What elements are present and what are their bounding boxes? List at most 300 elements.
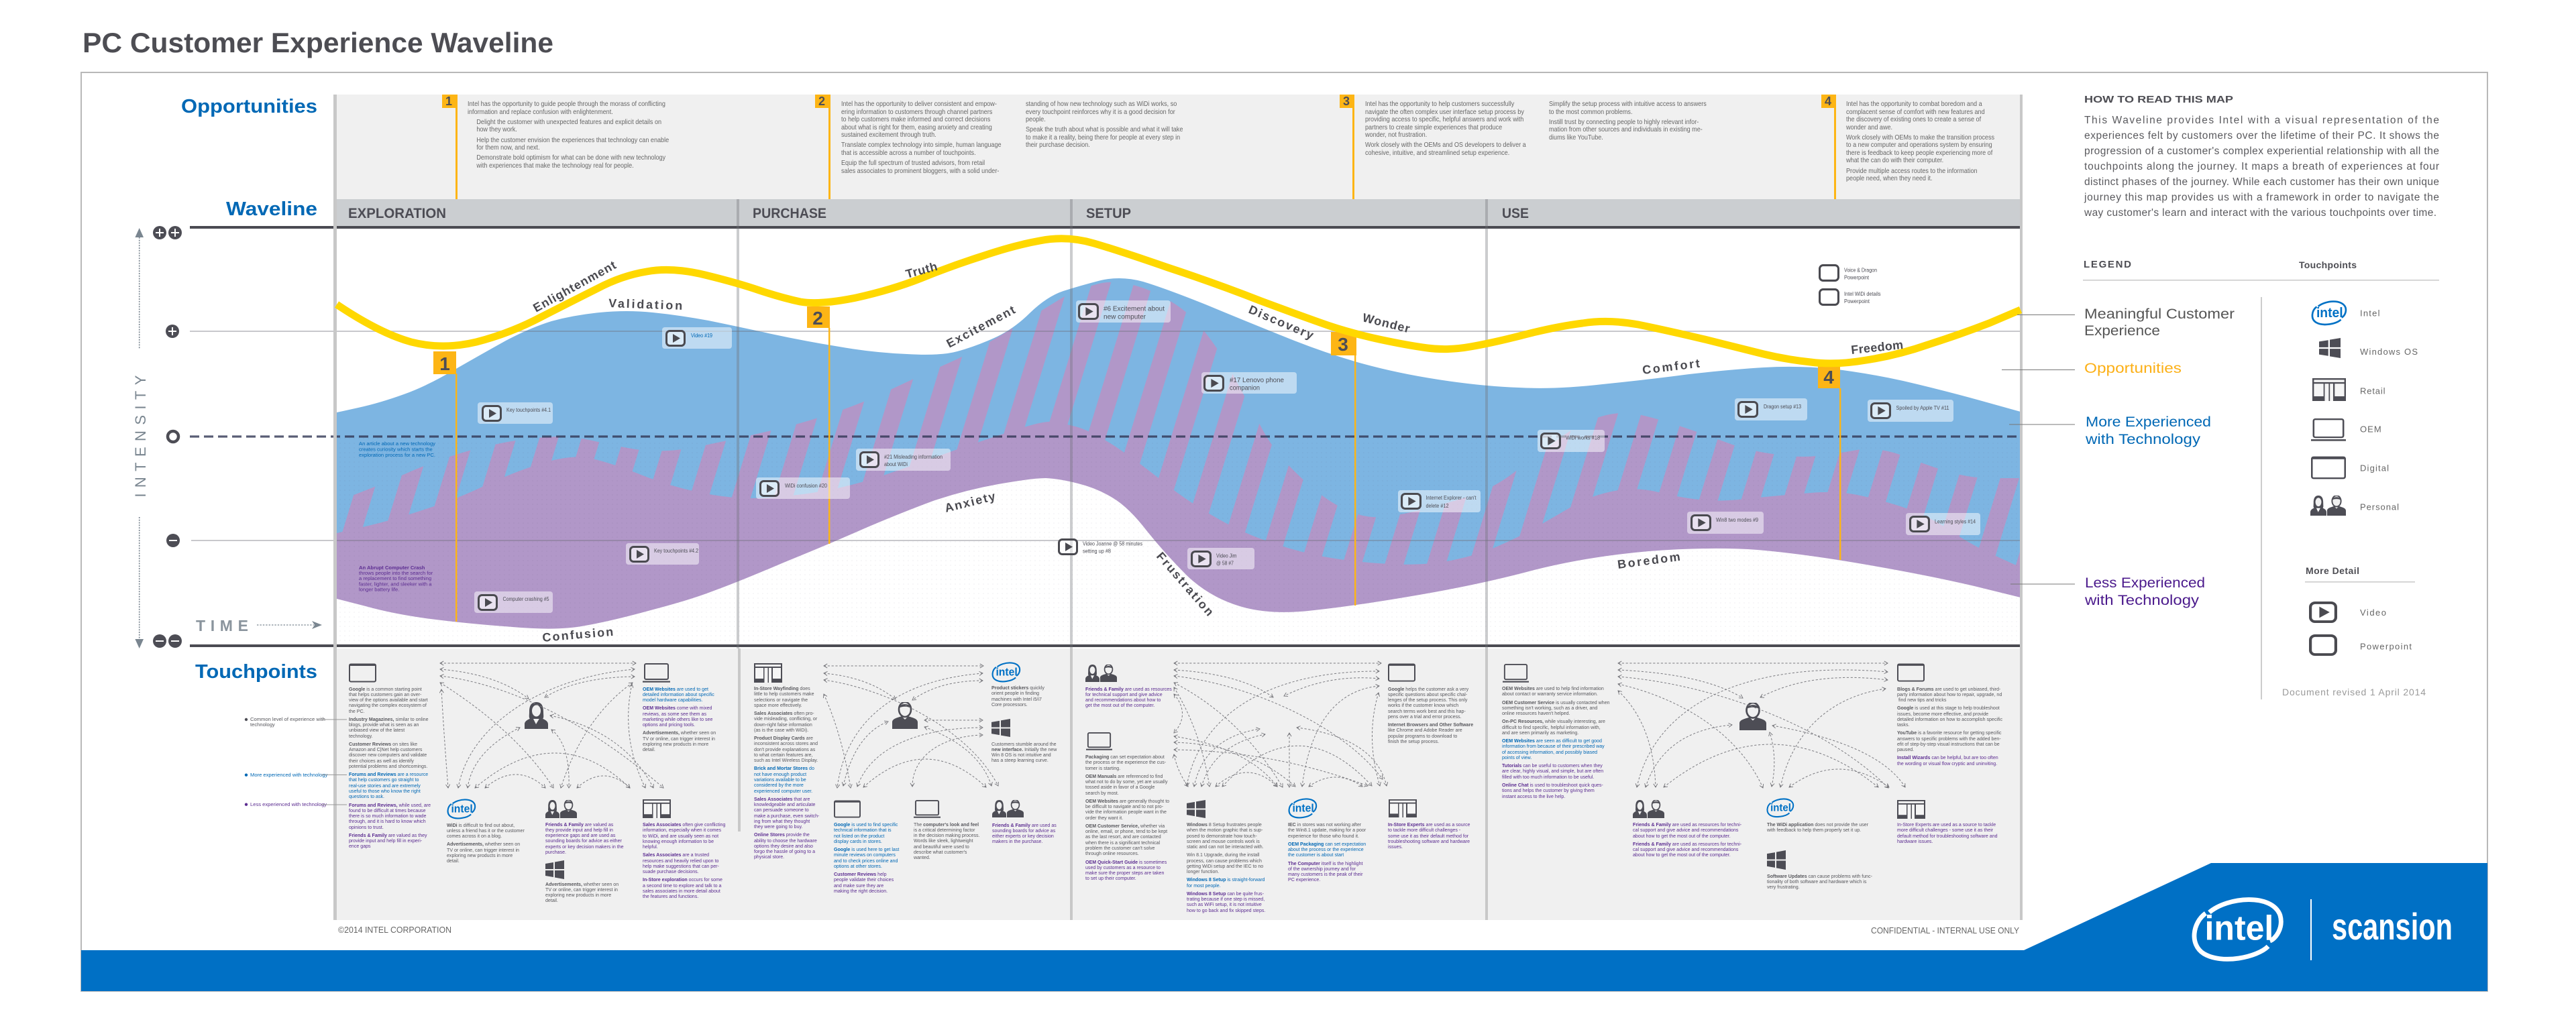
purchase text: digital: and make sure they are xyxy=(834,882,883,889)
purchase text: retail: space more effectively. xyxy=(754,702,802,708)
setup text: oem: search by most. xyxy=(1085,790,1119,796)
exploration text: digital: provide input and help fill in experi- xyxy=(349,838,422,844)
opportunity text 1: for them now, and next. xyxy=(476,144,540,152)
opportunity text 2, second column: every touchpoint reinforces why it is a good decision for xyxy=(1026,109,1175,115)
title: PC Customer Experience Waveline xyxy=(83,27,553,58)
purchase text: retail: knowledgeable and articulate xyxy=(754,801,815,807)
use text: oem xyxy=(1502,685,1610,799)
chip: internet explorer: Internet Explorer - can't xyxy=(1426,495,1477,501)
setup text: personal: for technical support and give advice xyxy=(1085,691,1163,697)
chip: internet explorer: delete #12 xyxy=(1426,503,1449,509)
legend: more experienced: with Technology xyxy=(2085,432,2201,447)
use text: retail: In-Store Experts are used as a source to tackle xyxy=(1897,821,1996,827)
setup text: oem: OEM Manuals are referenced to find xyxy=(1085,773,1163,779)
area: more experienced xyxy=(337,278,2021,647)
legend item: video: Video xyxy=(2360,608,2386,618)
exploration text: windows xyxy=(545,881,619,903)
exploration text: digital: opinions to trust. xyxy=(349,824,384,830)
setup text: windows: when the motion graphic that is sup- xyxy=(1187,827,1263,833)
opportunity text 1: how they work. xyxy=(476,126,517,133)
chip: video jim: @ 58 #7 xyxy=(1216,561,1234,566)
setup text: oem: when there is a significant technical xyxy=(1085,840,1160,846)
use text: personal: cal support and give advice and recommendations xyxy=(1633,827,1738,833)
setup text: digital: Google helps the customer ask a very xyxy=(1388,685,1468,692)
legend: touchpoint icons xyxy=(2310,302,2418,516)
exploration text: digital: blogs, provide what is seen as an xyxy=(349,722,419,728)
use text: intel: The WiDi application does not provide the user xyxy=(1767,821,1868,827)
setup text: digital: like Chrome and Adobe Reader are xyxy=(1388,727,1462,733)
legend: less experienced xyxy=(2084,575,2205,608)
legend: meaningful customer experience: Meaningful Customer xyxy=(2084,306,2235,322)
exploration text: oem: Advertisements, whether seen on xyxy=(643,730,716,736)
opportunity text 2, second column: people. xyxy=(1026,116,1046,123)
setup text: oem: vide the information people want in the xyxy=(1085,809,1167,815)
exploration text: windows: detail. xyxy=(545,897,557,903)
opportunity text 4 xyxy=(1846,101,1994,182)
purchase text: digital: minute reviews on computers xyxy=(834,852,896,858)
use text: retail xyxy=(1897,821,1998,844)
touchpoint key: experience levels: Common level of experience with xyxy=(250,716,325,722)
setup text: digital: search terms work best and this hap- xyxy=(1388,708,1466,714)
exploration text: oem: detailed information about specific xyxy=(643,691,714,697)
setup text: intel xyxy=(1288,821,1366,882)
legend divider xyxy=(2261,297,2262,699)
purchase text: retail: not have enough product xyxy=(754,771,806,777)
exploration text: retail: a second time to explore and talk to a xyxy=(643,882,721,889)
area: below the wave xyxy=(337,478,2021,647)
setup text: windows: for most people. xyxy=(1187,882,1221,889)
use text: digital: tasks. xyxy=(1897,722,1909,728)
chip: misleading information xyxy=(856,449,951,471)
chip: misleading information: #21 Misleading information xyxy=(884,454,943,460)
purchase text: retail: ability to choose the hardware xyxy=(754,838,817,844)
use text: retail: hardware issues. xyxy=(1897,838,1933,844)
opportunity text 2, first column: sales associates to prominent bloggers, with a solid under- xyxy=(841,168,999,175)
wave emotion labels xyxy=(531,258,1904,644)
phase header band: EXPLORATION xyxy=(348,206,446,221)
purchase text: retail: Sales Associates that are xyxy=(754,796,810,802)
setup text: windows: posed to demonstrate how touch- xyxy=(1187,833,1257,839)
opportunity text 1: Demonstrate bold optimism for what can be done with new technology xyxy=(476,154,665,162)
axis: time arrow and label xyxy=(196,617,322,634)
exploration text: digital: Customer Reviews on sites like xyxy=(349,741,417,747)
use text: oem: and are seen primarily as marketing. xyxy=(1502,730,1578,736)
setup text: intel: many customers is the peak of their xyxy=(1288,871,1362,877)
setup text: retail: In-Store Experts are used as a source xyxy=(1388,821,1470,827)
axis: intensity arrow and label xyxy=(132,228,149,648)
legend item: digital: Digital xyxy=(2360,463,2389,473)
legend item: personal: Personal xyxy=(2360,502,2399,512)
opportunity text 4: Provide multiple access routes to the information xyxy=(1846,168,1978,175)
legend heading: LEGEND xyxy=(2084,259,2131,270)
use text: personal: about how to get the most out of the computer. xyxy=(1633,852,1731,858)
setup text: retail: troubleshooting software and hardware xyxy=(1388,838,1470,844)
legend heading: Touchpoints xyxy=(2299,260,2357,270)
setup text: retail: to tackle more difficult challenges - xyxy=(1388,827,1460,833)
opportunity text 2, second column: Speak the truth about what is possible and what it will take xyxy=(1026,126,1183,133)
opportunity text 3, first column: providing access to specific, helpful answers and work with xyxy=(1364,116,1523,123)
purchase text: retail: (as is the case with WiDi). xyxy=(754,727,808,733)
purchase text: digital: options at other stores. xyxy=(834,863,882,869)
purchase text: digital: display cards in stores. xyxy=(834,838,882,844)
use text: digital: find new tips and tricks xyxy=(1898,697,1946,703)
setup text: intel: the Win8.1 update, making for a poor xyxy=(1288,827,1366,833)
exploration text: windows: Advertisements, whether seen on xyxy=(545,881,619,886)
chip: excitement about new computer xyxy=(1076,300,1171,323)
icons: purchase: intel xyxy=(996,666,1018,678)
exploration text: digital: useful to those who know the right xyxy=(349,788,421,794)
purchase text: retail: they were going to buy. xyxy=(754,823,803,829)
setup text: digital: lenges of the setup process. This only xyxy=(1388,697,1467,703)
icons: use: intel xyxy=(1770,802,1791,813)
opportunity text 1: Delight the customer with unexpected features and explicit details on xyxy=(476,119,661,126)
setup text: oem: OEM Customer Service, whether via xyxy=(1085,823,1165,829)
footer note: copyright: ©2014 INTEL CORPORATION xyxy=(338,925,451,935)
setup text: intel: the customer is about start xyxy=(1288,852,1344,858)
purchase text: windows xyxy=(991,740,1057,763)
use text: digital: YouTube is a favorite resource for getting specific xyxy=(1897,730,2002,736)
exploration text: digital: questions to ask. xyxy=(349,793,384,799)
use text: oem: points of view. xyxy=(1502,754,1532,760)
purchase text: oem: The computer's look and feel xyxy=(914,821,979,827)
video chips xyxy=(474,266,1980,613)
purchase text: digital: technical information that is xyxy=(834,827,891,833)
exploration text: digital: there is so much information to wade xyxy=(349,813,426,819)
use text: oem: OEM Customer Service is usually contacted when xyxy=(1502,699,1610,705)
exploration text: personal: Friends & Family are valued as xyxy=(545,821,613,827)
chip: dragon setup xyxy=(1735,398,1807,420)
setup text: windows: process, can cause problems which xyxy=(1187,858,1262,864)
chart annotation: article: creates curiosity which starts the xyxy=(359,447,433,452)
purchase text: retail: such as Intel Wireless Display. xyxy=(754,757,818,763)
opportunity flags: 2 xyxy=(818,95,825,108)
chip: learning styles: Learning styles #14 xyxy=(1935,519,1976,524)
use text: oem: are clear, highly visual, and simple, but are often xyxy=(1502,768,1603,774)
opportunity text 1 xyxy=(468,101,669,170)
legend: opportunities: Opportunities xyxy=(2084,361,2182,376)
use text: digital: paused. xyxy=(1897,746,1914,752)
meaningful customer experience curve xyxy=(337,239,2021,363)
use text: digital: the wording or visual flow cryptic and uninviting. xyxy=(1897,760,1997,766)
opportunity text 3, second column: mation from other sources and individuals in existing me- xyxy=(1549,126,1703,133)
legend item: powerpoint: Powerpoint xyxy=(2360,641,2412,652)
use text: oem: instant access to the live help. xyxy=(1502,793,1565,799)
opportunity text 2, second column xyxy=(1026,101,1183,149)
opportunity text 4: there is feedback to keep people experiencing more of xyxy=(1846,150,1992,157)
purchase text: windows: Customers stumble around the xyxy=(991,740,1057,747)
exploration text: personal: purchase. xyxy=(545,849,566,855)
setup text: retail xyxy=(1388,821,1470,850)
setup text: intel: PC experience. xyxy=(1288,876,1320,882)
setup text: intel: IEC in stores was not working after xyxy=(1288,821,1361,827)
purchase text: intel: machines with Intel i5/i7 xyxy=(991,696,1042,702)
exploration text: oem: exploring new products in more xyxy=(643,741,708,747)
touchpoint map: purchase xyxy=(754,663,1024,818)
use text: intel: with feedback to help them properly set it up. xyxy=(1767,827,1861,833)
setup text: oem: order they want it. xyxy=(1085,815,1123,821)
setup text: windows: Windows 8 Setup frustrates people xyxy=(1187,821,1262,827)
opportunity text 1: information and replace confusion with enlightenment. xyxy=(468,109,613,115)
legend item: oem xyxy=(2311,419,2381,441)
opportunity text 3, first column xyxy=(1364,101,1526,157)
chip: widi confusion: WiDi confusion #20 xyxy=(785,483,828,489)
setup text: windows: Win 8.1 Upgrade, during the install xyxy=(1187,852,1259,858)
opportunity flags: 3 xyxy=(1343,95,1350,108)
exploration text: windows: TV or online, can trigger interest in xyxy=(545,886,618,893)
wave emotion labels: Discovery xyxy=(1246,302,1316,342)
legend item: intel xyxy=(2312,302,2380,325)
purchase text: digital: making the right decision. xyxy=(834,888,888,894)
exploration text: digital: the PC. xyxy=(349,708,365,714)
purchase text: windows: has a steep learning curve. xyxy=(991,757,1049,763)
chip: video joanne xyxy=(1059,539,1142,554)
exploration text: digital: through, and it is hard to know which xyxy=(349,818,426,824)
exploration text: retail: resources and heavily relied upon to xyxy=(643,858,718,864)
use text: digital: Install Wizards can be helpful, but are too often xyxy=(1897,754,1998,760)
opportunity text 3, first column: wonder, not frustration. xyxy=(1364,131,1427,139)
icons: purchase xyxy=(754,663,1024,818)
purchase text: retail: options they desire and also xyxy=(754,843,813,849)
chip: video jim xyxy=(1187,548,1254,569)
opportunity text 2, first column: sustained excitement through truth. xyxy=(841,131,936,139)
arrows: setup xyxy=(1174,663,1387,787)
purchase text: oem xyxy=(914,821,979,860)
purchase text: personal xyxy=(992,822,1057,844)
powerpoint: intel widi details xyxy=(1820,290,1881,304)
setup text: windows: getting WiDi setup and the IEC to no xyxy=(1187,863,1263,869)
opportunity text 3, first column: navigate the often complex user interface setup process by xyxy=(1364,109,1523,115)
legend: meaningful customer experience xyxy=(2084,306,2235,339)
wave emotion labels: Comfort xyxy=(1642,357,1701,377)
setup text: windows: how to go back and fix skipped steps. xyxy=(1187,907,1265,913)
setup text: intel: of the ownership journey and for xyxy=(1288,866,1356,872)
use text: oem: OEM Websites are seen as difficult to get good xyxy=(1502,738,1602,744)
setup text: intel: OEM Packaging can set expectation xyxy=(1288,841,1366,847)
panel: touchpoints background xyxy=(337,648,2020,920)
setup text: oem: tossed aside in favor of a Google xyxy=(1085,784,1155,790)
chip: widi works: WiDi works #18 xyxy=(1566,435,1600,441)
exploration text: personal: experience gaps and are used as xyxy=(545,832,615,838)
exploration text: oem: detail. xyxy=(643,746,655,752)
purchase text: personal: sounding boards for advice as xyxy=(992,827,1055,834)
legend leader lines xyxy=(2002,314,2075,585)
setup text: windows: trating because if one step is missed, xyxy=(1187,896,1265,902)
use text: oem: information from because of their prescribed way xyxy=(1502,743,1605,749)
wave emotion labels: Truth xyxy=(904,260,938,281)
how to read heading: HOW TO READ THIS MAP xyxy=(2084,94,2233,105)
use text: digital xyxy=(1897,685,2002,766)
opportunity text 4: wonder and awe. xyxy=(1846,123,1892,131)
exploration text: digital: navigating the complex ecosystem of xyxy=(349,702,427,708)
wave emotion labels: Enlightenment xyxy=(531,258,619,314)
legend item: video xyxy=(2310,603,2386,622)
chart annotation: crash: faster, lighter, and sleeker with a xyxy=(359,581,432,587)
setup text: retail: some use it as their default method for xyxy=(1388,833,1468,839)
exploration text: oem: OEM Websites come with mixed xyxy=(643,705,712,711)
chip: video joanne: setting up #8 xyxy=(1083,549,1112,554)
opportunity lines and markers on chart: 3 xyxy=(1338,334,1348,355)
exploration text: oem: reviews, as some see them as xyxy=(643,711,706,717)
exploration text: digital: Forums and Reviews are a resource xyxy=(349,771,428,777)
purchase text: retail: selections or navigate the xyxy=(754,697,808,703)
chip: video jim: Video Jim xyxy=(1216,553,1237,559)
setup text: digital xyxy=(1388,685,1473,744)
purchase text: retail: Online Stores provide the xyxy=(754,832,810,838)
touchpoint key: experience levels xyxy=(245,716,347,807)
purchase text: retail: can persuade someone to xyxy=(754,807,809,813)
exploration text: digital: Forums and Reviews, while used, are xyxy=(349,802,431,808)
opportunity text 4: Intel has the opportunity to combat boredom and a xyxy=(1846,101,1982,108)
exploration text: intel: WiDi is difficult to find out about, xyxy=(447,822,515,827)
exploration text: personal: sounding boards for advice as either xyxy=(545,838,621,844)
legend item: retail: Retail xyxy=(2360,386,2385,396)
wave emotion labels: Wonder xyxy=(1361,310,1411,335)
exploration text: digital: potential problems and shortcomings. xyxy=(349,763,427,769)
exploration text: retail: In-Store exploration occurs for some xyxy=(643,876,722,882)
setup text: digital: finish the setup process. xyxy=(1388,738,1439,744)
icons: exploration xyxy=(350,664,671,879)
use text: digital: Blogs & Forums are used to get unbiased, third- xyxy=(1897,685,2000,692)
chip: misleading information: about WiDi xyxy=(884,461,908,467)
chip: widi works xyxy=(1538,430,1605,452)
purchase text: retail: Brick and Mortar Stores do xyxy=(754,765,814,771)
panel: opportunities background xyxy=(335,95,2021,199)
setup text: intel: The Computer itself is the highlight xyxy=(1288,860,1362,866)
exploration text: oem: OEM Websites are used to get xyxy=(643,685,708,692)
opportunity text 2, first column: Translate complex technology into simple, human language xyxy=(841,141,1001,149)
opportunity text 2, second column: their purchase decision. xyxy=(1026,141,1090,149)
setup text: oem: the process or the experience the cus- xyxy=(1085,759,1166,765)
purchase text: retail: variations available to be xyxy=(754,777,806,783)
wave emotion labels: Boredom xyxy=(1617,550,1681,571)
setup text: oem: as the last resort, and are contacted xyxy=(1085,834,1161,840)
opportunity text 4: the discovery of existing ones to create a sense of xyxy=(1846,116,1981,123)
use text: digital: Google is used at this stage to help troubleshoot xyxy=(1897,705,2000,711)
opportunity text 3, first column: partners to create simple experiences that produce xyxy=(1364,123,1502,131)
exploration text: digital: real-use stories and are extremely xyxy=(349,783,421,789)
setup text: oem: OEM Quick-Start Guide is sometimes xyxy=(1085,859,1167,865)
use text: windows: tionality of both software and hardware which is xyxy=(1767,878,1866,884)
opportunity lines and markers on chart: 1 xyxy=(439,353,450,374)
purchase text: digital: Customer Reviews help xyxy=(834,871,886,877)
icons: setup xyxy=(1085,664,1417,818)
setup text: personal: get the most out of the computer. xyxy=(1085,702,1155,708)
purchase text: oem: Words like sleek, lightweight xyxy=(914,838,973,844)
purchase text: oem: in the decision making process. xyxy=(914,832,979,838)
legend item: personal xyxy=(2310,496,2399,516)
purchase text: personal: Friends & Family are used as xyxy=(992,822,1057,827)
opportunity flags: 4 xyxy=(1825,95,1831,108)
opportunity flags: 1 xyxy=(445,95,452,108)
opportunity lines and markers on chart: 2 xyxy=(812,308,823,329)
purchase text: retail: make a purchase, even switch- xyxy=(754,813,819,819)
chart annotation: article: An article about a new technology xyxy=(359,441,435,447)
opportunity flags xyxy=(442,95,1836,199)
wave emotion labels: Freedom xyxy=(1850,338,1904,357)
chart annotation: crash: a replacement to find something xyxy=(359,575,431,581)
setup text: oem: online, email, or phone, tend to be kept xyxy=(1085,828,1167,834)
setup text: digital: works if the customer know which xyxy=(1388,702,1458,708)
chart annotation: article: exploration process for a new PC. xyxy=(359,452,435,458)
wave emotion labels: Excitement xyxy=(944,303,1018,351)
area: striped overlap xyxy=(337,282,2021,647)
legend item: windows xyxy=(2319,338,2418,358)
opportunity text 2, first column: Intel has the opportunity to deliver consistent and empow- xyxy=(841,101,996,108)
section heading: waveline: Waveline xyxy=(226,198,317,220)
exploration text: intel: exploring new products in more xyxy=(447,852,513,858)
exploration text: retail: sales associates in more detail about xyxy=(643,888,720,894)
use text: retail: default method for troubleshooting software and xyxy=(1897,833,1998,839)
opportunity text 1: Help the customer envision the experiences that technology can enable xyxy=(476,137,669,144)
arrows: purchase xyxy=(824,666,998,788)
opportunity text 3, first column: Work closely with the OEMs and OS developers to deliver a xyxy=(1364,141,1525,149)
setup text: digital: pens over a trial and error process. xyxy=(1388,713,1462,720)
exploration text: retail: helpful. xyxy=(643,844,658,850)
setup text: digital: popular programs to download to xyxy=(1388,733,1457,739)
opportunity text 3, second column: Simplify the setup process with intuitive access to answers xyxy=(1549,101,1707,108)
opportunity text 3, first column: Intel has the opportunity to help customers successfully xyxy=(1364,101,1514,108)
chip: lenovo phone companion: #17 Lenovo phone xyxy=(1230,377,1284,384)
opportunity text 2, second column: to make it a reality, being there for people at every step in xyxy=(1026,134,1180,141)
purchase text: retail: vide misleading, conflicting, or xyxy=(754,716,817,722)
exploration text: retail xyxy=(643,821,725,899)
setup text: windows: screen and mouse controls work is xyxy=(1187,838,1260,844)
exploration text: personal xyxy=(545,821,624,855)
chip: win8 two modes: Win8 two modes #9 xyxy=(1716,517,1758,523)
opportunity text 2, first column: Equip the full spectrum of trusted advisors, from retail xyxy=(841,160,985,167)
purchase text: retail: ing from what they thought xyxy=(754,818,810,824)
exploration text: digital: that helps customers gain an over- xyxy=(349,691,421,697)
opportunity text 4: Work closely with OEMs to make the transition process xyxy=(1846,134,1994,141)
setup text: personal: and recommendations about how to xyxy=(1085,697,1161,703)
purchase text: retail: don't provide explanations as xyxy=(754,746,815,752)
exploration text: oem xyxy=(643,685,716,752)
use text: oem: about contact or warranty service information. xyxy=(1502,691,1598,697)
purchase text: retail: experienced computer user. xyxy=(754,788,812,794)
how to read body: touchpoints along the journey. It maps a breath of experiences at four xyxy=(2084,161,2439,172)
powerpoint: voice and dragon: Voice & Dragon xyxy=(1844,267,1877,274)
legend: more experienced xyxy=(2085,414,2211,447)
opportunity text 1: Intel has the opportunity to guide people through the morass of conflicting xyxy=(468,101,665,108)
legend item: oem: OEM xyxy=(2360,424,2381,435)
purchase text: retail: Sales Associates often pro- xyxy=(754,710,814,716)
exploration text: windows: exploring new products in more xyxy=(545,892,611,898)
setup text: oem: through online resources. xyxy=(1085,850,1139,856)
purchase text: retail: In-Store Wayfinding does xyxy=(754,685,810,691)
opportunity text 2, second column: standing of how new technology such as WiDi works, so xyxy=(1026,101,1177,108)
purchase text: retail: forgo the hassle of going to a xyxy=(754,848,815,854)
chart annotation: crash: throws people into the search for xyxy=(359,570,433,576)
setup text: personal xyxy=(1085,685,1172,708)
phase header band: PURCHASE xyxy=(753,206,826,221)
logo: scansion: scansion xyxy=(2332,905,2453,948)
area: less experienced xyxy=(337,422,2021,647)
icons: setup: intel xyxy=(1292,802,1314,814)
setup text: oem: problem the customer can't solve xyxy=(1085,845,1155,851)
chip: internet explorer xyxy=(1398,490,1481,512)
powerpoint: voice and dragon: Powerpoint xyxy=(1844,275,1870,280)
setup text: oem: OEM Websites are generally thought to xyxy=(1085,798,1169,804)
touchpoint map: setup xyxy=(1085,663,1417,818)
opportunity text 2, first column xyxy=(841,101,1001,175)
legend: more detail heading: More Detail xyxy=(2306,565,2359,576)
chip: key touchpoints 4.2: Key touchpoints #4.2 xyxy=(654,548,698,554)
powerpoint: intel widi details: Intel WiDi details xyxy=(1844,291,1881,297)
purchase text: digital: not listed on the product xyxy=(834,833,884,839)
exploration text: digital: Friends & Family are valued as they xyxy=(349,832,427,838)
setup text: windows: such as WiFi setup, it is not intuitive xyxy=(1187,901,1262,907)
setup text: retail: issues. xyxy=(1388,844,1403,850)
